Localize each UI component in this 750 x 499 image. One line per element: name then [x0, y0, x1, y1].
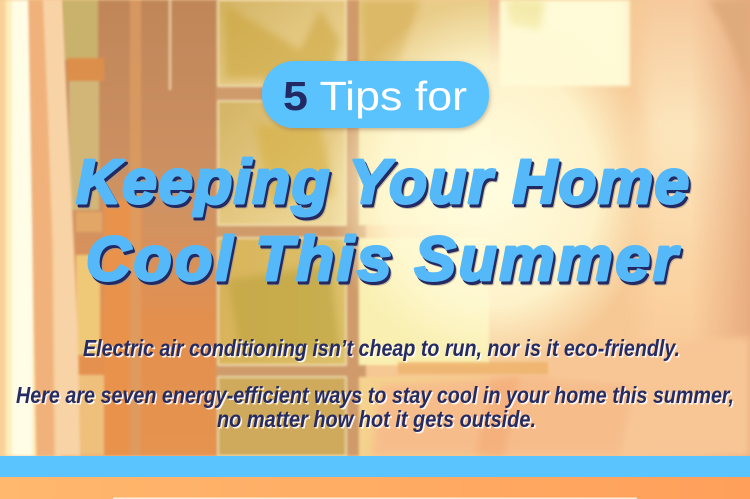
lower window bar: [398, 362, 548, 374]
title line 1: Keeping Your Home: [76, 148, 689, 217]
sofa cushions: [372, 337, 750, 456]
palm foliage: [225, 0, 545, 355]
title line 1: Keeping Your Home: [79, 152, 692, 221]
blue band: [0, 456, 750, 477]
sentence 2: no matter how hot it gets outside.: [218, 408, 538, 434]
right wall: [640, 0, 750, 480]
white card top edge: [113, 498, 637, 499]
title line 2: Cool This Summer: [86, 225, 680, 294]
sentence 2: no matter how hot it gets outside.: [217, 406, 536, 432]
title line 1: Keeping Your Home: [78, 151, 691, 220]
title line 2: Cool This Summer: [89, 229, 683, 298]
orange band: [0, 477, 750, 499]
window panes: [216, 0, 630, 456]
wooden door frame: [62, 0, 220, 456]
title line 2: Cool This Summer: [88, 228, 682, 297]
badge: 5 Tips for: 5 Tips for: [283, 73, 467, 119]
sun glare: [325, 0, 655, 370]
sentence 2: [16, 382, 736, 434]
title: [76, 148, 692, 298]
curtain: [0, 0, 80, 456]
intro text: [16, 335, 736, 434]
badge: 5 Tips for: [262, 61, 489, 128]
